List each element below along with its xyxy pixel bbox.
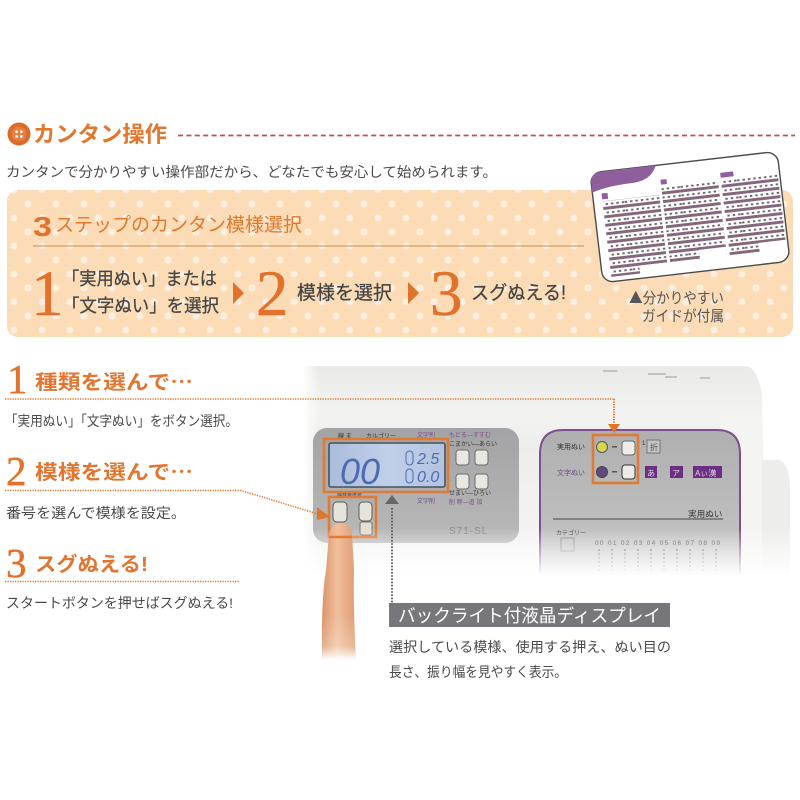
caption: guide: ガイドが付属 [642,308,724,325]
step 3 heading: スグぬえる! [35,552,148,576]
panel labels [337,431,497,537]
step 3 description: スタートボタンを押せばスグぬえる! [6,595,233,611]
LCD display: 2.5 [416,451,439,468]
caption: guide [629,287,724,325]
step 2 heading: 2 [6,448,26,494]
step 3 heading: 3 [6,540,26,586]
arrow: to stitch selector [5,399,620,433]
step 3 [430,258,566,330]
panel labels: せまい―ひろい [449,490,491,497]
right control panel [540,430,740,600]
step 3: 3 [430,258,462,330]
step 1: 1 [31,258,64,330]
panel labels: S71-SL [449,526,488,537]
step 3: スグぬえる! [471,282,566,304]
panel labels: 削 除―追 加 [449,498,482,506]
guide card [590,151,790,283]
indicator lights and buttons [596,441,635,479]
step 3 dotted rule [5,580,240,582]
panel labels: こまかい―あらい [449,441,497,448]
stitch selector labels: Aぃ漢 [695,468,716,478]
intro text: カンタンで分かりやすい操作部だから、どなたでも安心して始められます。 [6,164,497,180]
stitch selector labels: 文字ぬい [557,468,585,477]
stitch chart [553,508,723,571]
panel labels: 文字削 [417,497,435,505]
panel labels: 文字列 [417,431,435,439]
panel labels: 模様番選択 [337,491,362,498]
heading text: カンタン操作 [33,122,167,147]
finger [315,523,365,660]
step 2: 模様を選択 [297,282,392,304]
panel heading [33,211,302,242]
panel labels: 線 ま [338,432,352,440]
caption: guide: ▲分かりやすい [629,287,724,308]
step section 1 [5,356,238,429]
LCD display: 00 [340,451,380,492]
panel heading: 3 [33,211,52,242]
stitch selector labels: 折 [650,442,658,452]
arrow: to LCD [385,495,399,603]
stitch chart: 実用ぬい [688,508,722,519]
pattern buttons [333,502,372,535]
dashed heading rule [178,134,795,136]
stitch selector labels: あ [647,469,655,478]
step 1 description: 「実用ぬい」「文字ぬい」をボタン選択。 [5,413,238,429]
arrow: step 2 to 3 [408,282,419,304]
callout description: 選択している模様、使用する押え、ぬい目の [389,639,671,655]
panel background [7,190,793,337]
LCD display: 0.0 [417,469,439,486]
panel: 3 step pattern selection [7,190,793,337]
heading: カンタン操作 [8,122,795,147]
body fade overlay [295,528,800,610]
step section 3 [5,540,240,611]
stitch selector labels: ア [672,469,680,478]
panel divider [33,245,584,247]
step 1 heading: 1 [7,356,28,402]
pattern buttons orange frame [329,497,376,537]
panel labels: カルゴリー [366,432,396,440]
stitch selector labels: 実用ぬい [557,442,585,451]
stitch chart: 00 01 02 03 04 05 06 07 08 09 [595,540,720,547]
arrow: to pattern buttons [5,490,330,520]
step 1: 「文字ぬい」を選択 [62,296,219,316]
panel heading: ステップのカンタン模様選択 [55,214,302,236]
machine body [303,366,790,606]
buttons right of LCD [456,450,488,489]
LCD display [329,443,445,492]
icon: orange button [8,122,30,146]
step 1 heading [7,356,193,402]
callout: backlit LCD [389,603,671,680]
step 1 [31,258,219,330]
callout description: 長さ、振り幅を見やすく表示。 [389,664,567,680]
LCD orange frame [324,439,448,492]
step section 2 [6,448,193,521]
step 2 description: 番号を選んで模様を設定。 [6,505,186,521]
stitch chart: カテゴリー [556,529,586,537]
step 2 heading [6,448,193,494]
step 1: 「実用ぬい」または [62,269,217,289]
step 3 heading [6,540,148,586]
step 2: 2 [256,258,288,330]
panel labels: もどる―すすむ [449,431,491,439]
image: sewing machine control panel [295,366,800,660]
left control panel [313,428,519,543]
callout description [389,639,671,680]
stitch selector labels: 1 [642,441,646,447]
step 2 [256,258,392,330]
step 1 heading: 種類を選んで… [35,366,193,395]
callout label bar: バックライト付液晶ディスプレイ [398,606,661,626]
stitch selector labels [557,440,722,478]
step 2 heading: 模様を選んで… [35,456,193,485]
arrow: step 1 to 2 [233,282,244,304]
selector orange frame [593,435,638,483]
